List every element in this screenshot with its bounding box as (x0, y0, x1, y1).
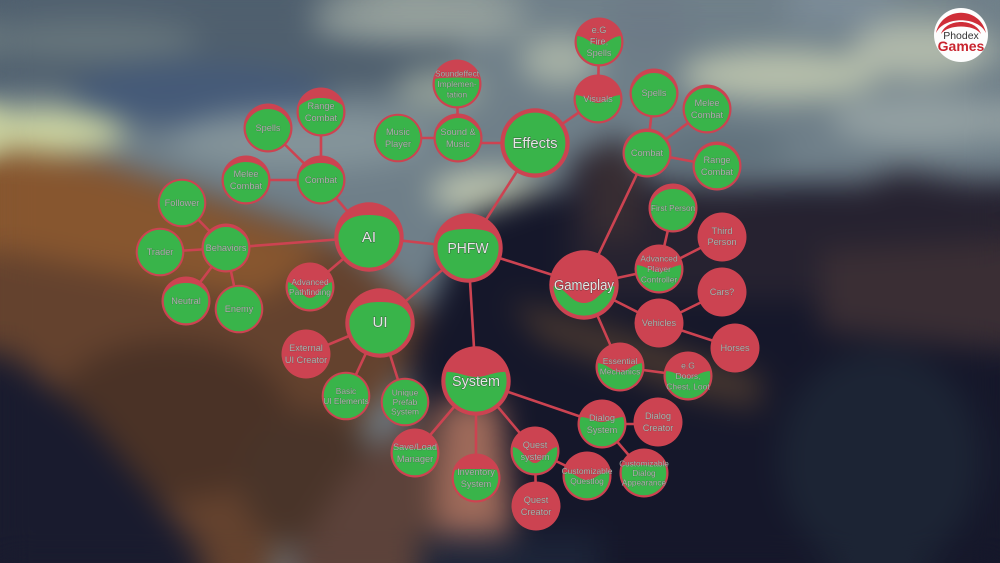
node: Music Player: Music (386, 127, 410, 137)
node: Unique Prefab System: Unique (392, 388, 418, 398)
node: Basic UI Elements: Basic (336, 386, 356, 396)
node: System (441, 346, 511, 416)
node: e.G Fire, Spells: Spells (586, 48, 612, 58)
node: PHFW: PHFW (448, 240, 489, 257)
node: Spells (AI): Spells (255, 123, 281, 133)
node: Range Combat (gameplay) (692, 142, 742, 190)
node: Sound & Music: Sound & (440, 127, 476, 137)
node: Customizable Questlog: Questlog (570, 476, 604, 486)
node: Neutral (162, 276, 210, 326)
node: Visuals: Visuals (583, 94, 613, 104)
node: Horses (710, 324, 760, 372)
node: Melee Combat (AI): Combat (230, 181, 263, 191)
node: System: System (452, 373, 500, 390)
node: Third Person: Third (712, 226, 732, 236)
node: AI: AI (362, 229, 376, 246)
node: Neutral: Neutral (171, 296, 201, 306)
logo: Phodex Games: Phodex (943, 30, 980, 42)
connector lines (160, 42, 735, 506)
node: Dialog System: System (587, 425, 618, 435)
node: Trader (136, 228, 184, 276)
node: e.G Doors, Chest, Loot: Doors, (675, 371, 701, 381)
node: Save/Load Manager: Save/Load (393, 442, 437, 452)
node: Dialog Creator (634, 398, 682, 446)
node: Combat (AI): Combat (305, 175, 338, 185)
node: Combat (gameplay): Combat (631, 148, 664, 158)
node: Basic UI Elements: UI Elements (323, 396, 369, 406)
node: Customizable Dialog Appearance: Customizable (619, 460, 669, 468)
node: Quest system (510, 426, 560, 476)
node: Quest system: system (520, 452, 550, 462)
node: Customizable Dialog Appearance: Appearance (622, 478, 667, 488)
node: Unique Prefab System: System (391, 406, 419, 416)
node: Effects (500, 108, 570, 178)
node: Range Combat (AI): Combat (305, 113, 338, 123)
node: e.G Doors, Chest, Loot (664, 352, 712, 400)
node: Trader: Trader (147, 247, 173, 257)
node: Dialog System (578, 400, 626, 448)
node: Combat (AI) (296, 156, 346, 204)
node: Inventory System: System (461, 479, 492, 489)
node: Advanced Pathfinding: Pathfinding (289, 287, 331, 297)
node: Quest system: Quest (523, 440, 547, 450)
node: Effects: Effects (512, 135, 558, 152)
node: UI (345, 288, 415, 358)
node: Melee Combat (gameplay): Combat (691, 110, 724, 120)
node: Advanced Player Controller: Controller (641, 274, 677, 284)
node: Melee Combat (AI) (222, 156, 270, 204)
node: e.G Fire, Spells: Fire, (590, 36, 608, 46)
node: AI (334, 202, 404, 272)
node: Vehicles: Vehicles (642, 318, 677, 328)
node: PHFW (433, 213, 503, 283)
node: Customizable Dialog Appearance: Dialog (632, 469, 656, 478)
logo: Phodex Games (934, 8, 988, 62)
logo: Phodex Games: Games (938, 38, 985, 54)
node: Spells (AI) (244, 104, 292, 152)
mind map (136, 18, 759, 530)
node: Third Person (698, 212, 746, 262)
node: Follower: Follower (165, 198, 199, 208)
node: Melee Combat (gameplay) (682, 84, 732, 134)
node: Inventory System (452, 454, 500, 502)
node: Gameplay: Gameplay (554, 277, 614, 294)
node: Range Combat (AI): Range (307, 101, 335, 111)
node: Save/Load Manager (390, 428, 440, 478)
node: Gameplay (549, 250, 619, 320)
node: Melee Combat (AI): Melee (233, 169, 259, 179)
node: Cars? (698, 268, 746, 316)
node: Range Combat (AI) (296, 88, 346, 136)
node: Essential Mechanics: Mechanics (600, 366, 640, 376)
node: Unique Prefab System: Prefab (393, 397, 418, 407)
node: Enemy: Enemy (225, 304, 254, 314)
node: Advanced Pathfinding (286, 262, 334, 312)
node: Spells (gameplay combat): Spells (641, 88, 667, 98)
node: Soundeffect Implementation: Soundeffect (435, 68, 479, 78)
node: Behaviors: Behaviors (206, 243, 247, 253)
node: Essential Mechanics: Essential (603, 356, 637, 366)
node: Save/Load Manager: Manager (397, 454, 433, 464)
node: Advanced Player Controller (634, 244, 684, 294)
node: Spells (gameplay combat) (630, 68, 678, 118)
node: Cars?: Cars? (710, 287, 734, 297)
node: Visuals (574, 74, 622, 124)
node: Vehicles (634, 298, 684, 348)
node: UI: UI (372, 314, 388, 331)
node: Combat (gameplay) (622, 128, 672, 178)
node: Music Player: Player (385, 139, 411, 149)
node: First Person (648, 184, 698, 232)
node: External UI Creator (282, 330, 330, 378)
node: External UI Creator: UI Creator (285, 355, 327, 365)
node: Advanced Player Controller: Player (647, 264, 671, 274)
node: Basic UI Elements (322, 372, 370, 420)
node: Range Combat (gameplay): Range (703, 155, 731, 165)
node: Advanced Player Controller: Advanced (640, 254, 678, 264)
node: Sound & Music: Music (446, 139, 470, 149)
node: Soundeffect Implementation: tation (447, 90, 468, 100)
node: External UI Creator: External (289, 343, 323, 353)
node: First Person: First Person (651, 204, 696, 213)
node: Soundeffect Implementation: Implemen- (437, 79, 477, 89)
node: Dialog System: Dialog (589, 413, 615, 423)
node: e.G Doors, Chest, Loot: e.G (681, 360, 695, 370)
node: Customizable Questlog: Customizable (562, 466, 612, 476)
node: Follower (158, 179, 206, 227)
node: Sound & Music (434, 114, 482, 162)
node: Advanced Pathfinding: Advanced (291, 277, 329, 287)
node: e.G Fire, Spells: e.G (592, 25, 606, 35)
node: Essential Mechanics (596, 342, 644, 392)
node: Horses: Horses (720, 343, 750, 353)
node: Quest Creator: Quest (524, 495, 548, 505)
node: Enemy (215, 285, 263, 333)
node: Music Player (374, 114, 422, 162)
node: Melee Combat (gameplay): Melee (694, 98, 720, 108)
node: Soundeffect Implementation (432, 60, 482, 108)
node: Quest Creator (512, 482, 560, 530)
node: Third Person: Person (707, 237, 737, 247)
node: Range Combat (gameplay): Combat (701, 167, 734, 177)
node: e.G Doors, Chest, Loot: Chest, Loot (666, 382, 710, 392)
node: Dialog Creator: Dialog (645, 411, 671, 421)
node: Dialog Creator: Creator (643, 423, 673, 433)
node: Unique Prefab System (381, 378, 429, 426)
node: Behaviors (202, 224, 250, 272)
node: Customizable Dialog Appearance (619, 448, 669, 498)
node: Quest Creator: Creator (521, 507, 551, 517)
node: Inventory System: Inventory (457, 467, 495, 477)
node: e.G Fire, Spells (574, 18, 624, 66)
node: Customizable Questlog (562, 452, 613, 500)
